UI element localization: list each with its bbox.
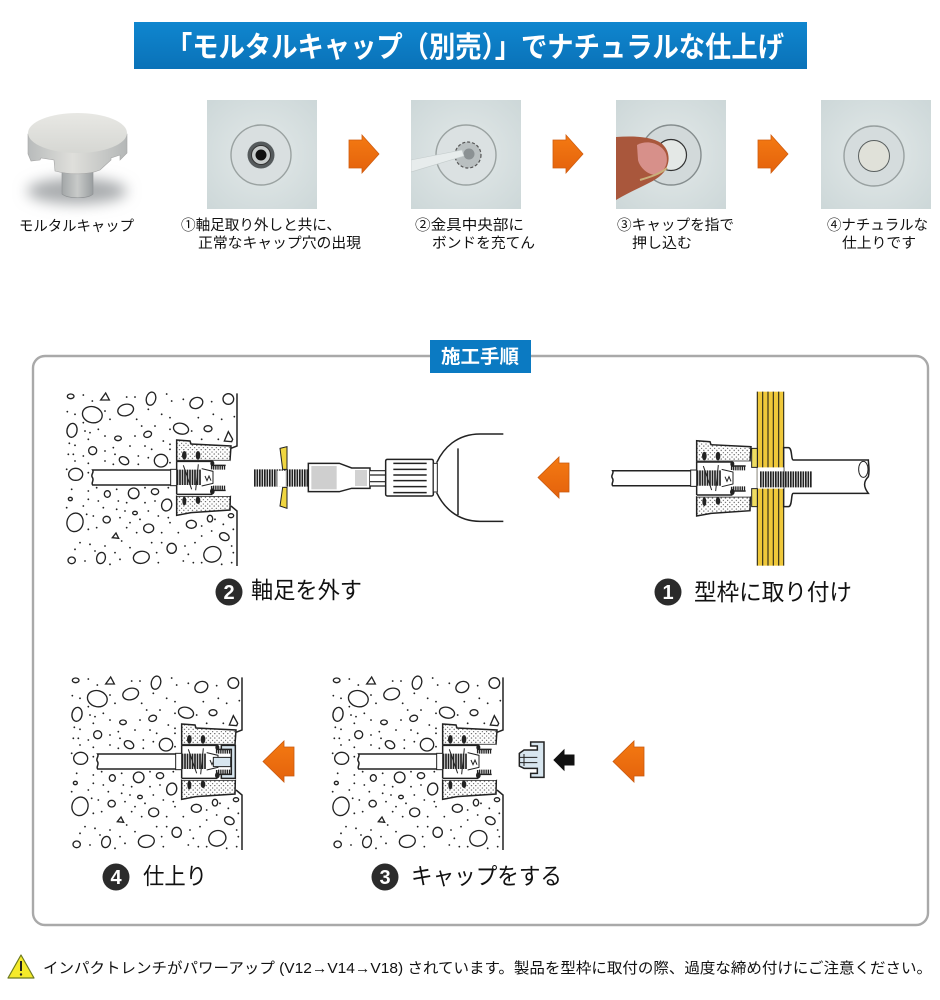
step 4 label: 4: [110, 867, 122, 889]
arrow 2: [553, 135, 583, 173]
step 3 insertion arrow: [554, 750, 574, 770]
caption 2: ②金具中央部に: [415, 217, 524, 234]
caption 4: 仕上りです: [842, 235, 916, 252]
step 4 label: 仕上り: [143, 863, 207, 889]
step 4 diagram: finished: [70, 675, 242, 850]
caption 4: [827, 217, 928, 252]
step 1 label: 1: [662, 582, 674, 604]
caption 2: [415, 217, 535, 252]
arrow 1: [349, 135, 379, 173]
step 2 diagram: concrete block: [65, 391, 237, 566]
caption 4: ④ナチュラルな: [827, 217, 928, 234]
step 3 label: キャップをする: [411, 863, 562, 889]
caption 1: [181, 217, 362, 252]
panel heading: [430, 340, 531, 373]
caption 3: [617, 217, 734, 252]
caption 1: 正常なキャップ穴の出現: [198, 235, 362, 252]
step 3 cap part: [519, 742, 544, 777]
step 2 label: 2: [223, 582, 235, 604]
caption 3: 押し込む: [632, 235, 692, 252]
mortar cap product photo: [27, 113, 127, 204]
photo 1: cap hole: [207, 100, 317, 209]
step 1 diagram: mounted on formwork: [612, 392, 869, 566]
photo 3: pressing cap with finger: [616, 100, 726, 209]
panel heading: 施工手順: [441, 346, 519, 368]
step 4 arrow: [263, 741, 294, 782]
title banner: 「モルタルキャップ（別売）」でナチュラルな仕上げ: [166, 31, 784, 64]
step 4 label: [102, 863, 207, 890]
step 2 label: [216, 577, 362, 606]
caption 2: ボンドを充てん: [432, 235, 535, 252]
panel: installation procedure: [33, 356, 928, 925]
photo 2: bond filling: [411, 100, 521, 209]
caption 3: ③キャップを指で: [617, 217, 734, 234]
step 3 diagram: concrete block: [331, 675, 503, 850]
caption 1: ①軸足取り外しと共に、: [181, 217, 341, 234]
step 2 label: 軸足を外す: [251, 577, 362, 603]
warning note: インパクトレンチがパワーアップ (V12→V14→V18) されています。製品を型枠に取付の際、過度な締め付けにご注意ください。: [43, 960, 932, 977]
step 3 label: 3: [379, 867, 391, 889]
title banner: [134, 22, 807, 69]
icon: warning triangle: [8, 955, 34, 978]
step 3 arrow: [613, 741, 644, 782]
step 2 diagram: removed bolt and impact wrench: [254, 434, 503, 521]
photo 4: natural finish: [821, 100, 931, 209]
step 1 arrow: [538, 457, 569, 498]
mortar cap caption: モルタルキャップ: [19, 218, 134, 235]
arrow 3: [758, 135, 788, 173]
step 1 label: 型枠に取り付け: [694, 579, 852, 605]
